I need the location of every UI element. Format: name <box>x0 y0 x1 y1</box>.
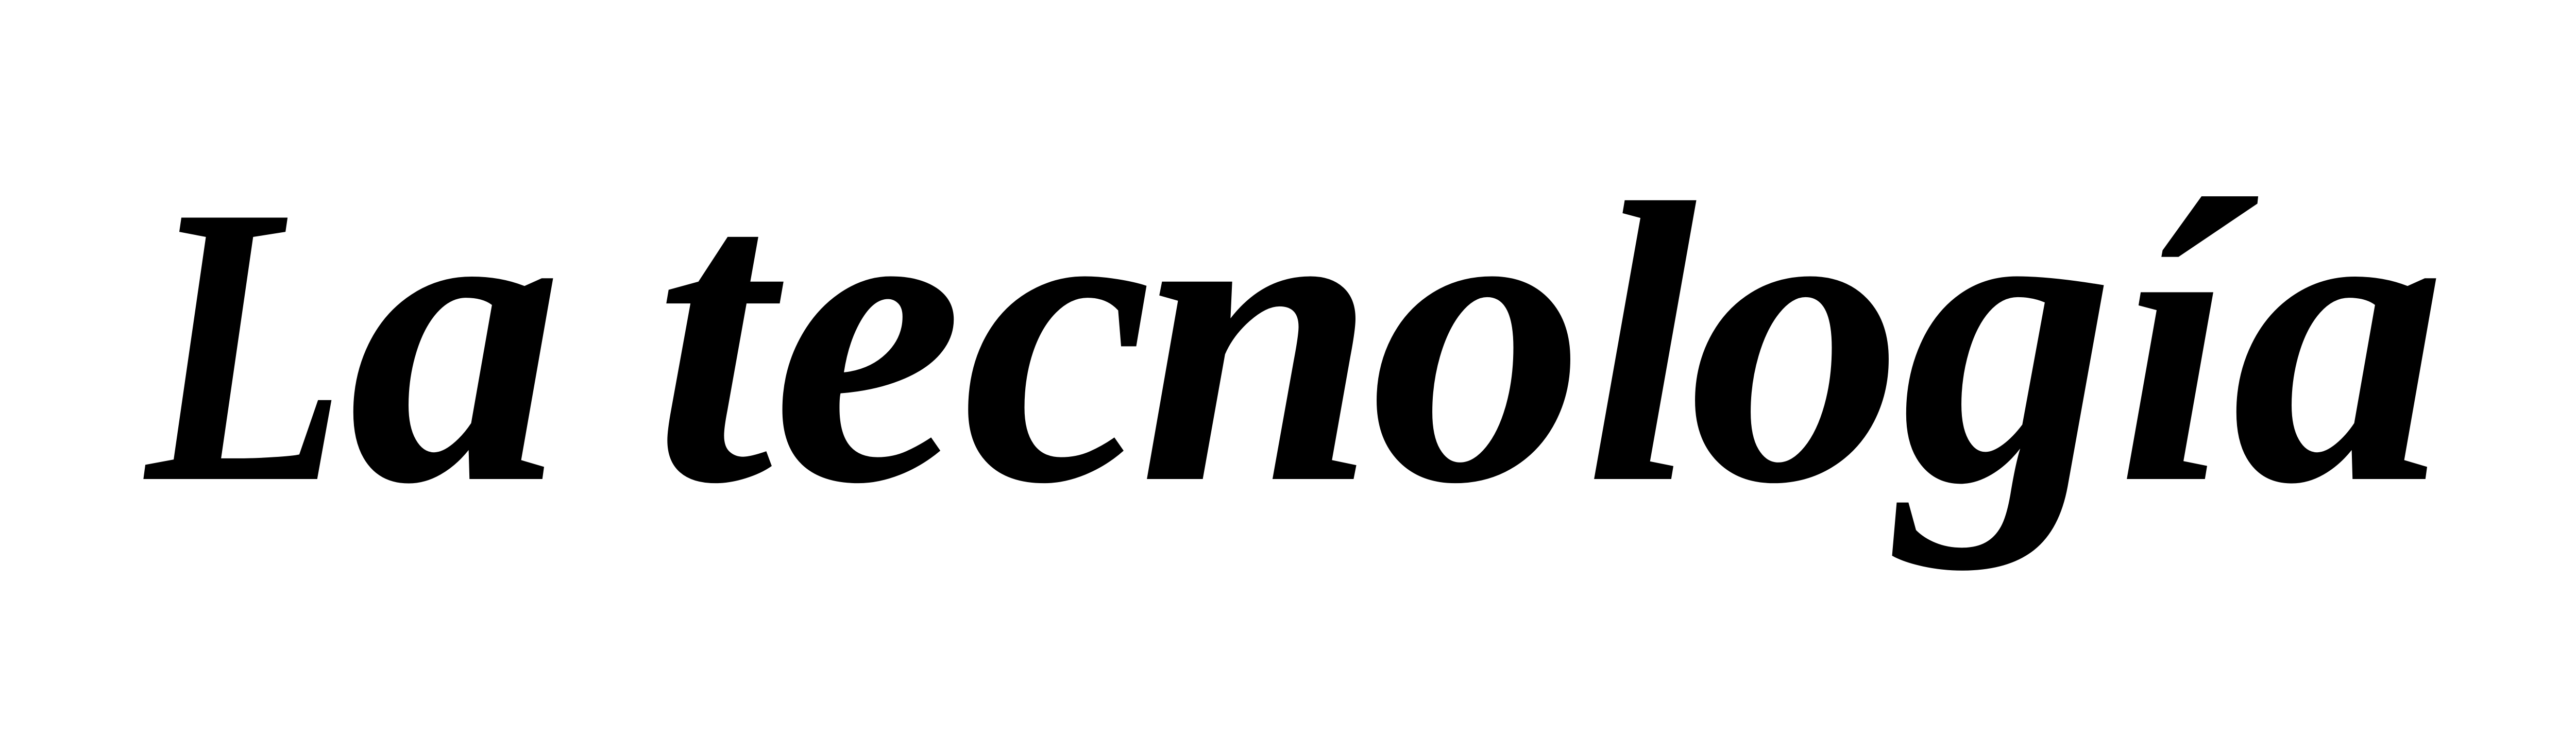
title: La tecnología <box>141 96 2446 573</box>
